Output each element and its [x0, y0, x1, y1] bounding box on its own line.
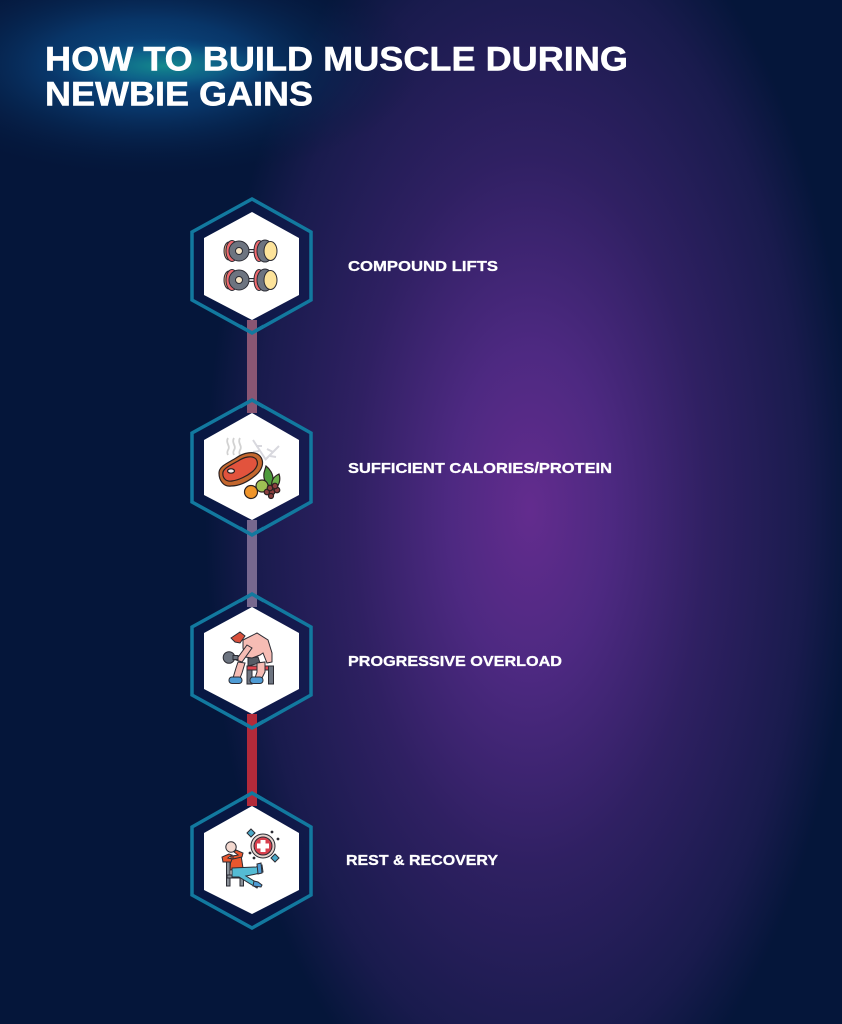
- connector: overload to rest: [247, 714, 257, 806]
- step 2: calories and protein: [192, 400, 311, 535]
- icon: resting person with medical cross: [222, 829, 279, 888]
- hexagon frame 3: [192, 594, 311, 728]
- label: sufficient calories/protein: SUFFICIENT CALORIES/PROTEIN: [348, 461, 612, 477]
- hexagon frame 2: [192, 400, 311, 535]
- label: progressive overload: PROGRESSIVE OVERLOAD: [348, 654, 562, 670]
- title: HOW TO BUILD MUSCLE DURING: [45, 40, 628, 78]
- sparkles: [249, 831, 279, 859]
- hexagon frame 4: [192, 793, 311, 928]
- connector: compound lifts to calories: [247, 320, 257, 413]
- icon: steak and produce: [219, 438, 280, 498]
- hexagon panel 1: [204, 212, 299, 320]
- title: [45, 40, 628, 114]
- step 1: compound lifts: [192, 199, 311, 333]
- label: rest and recovery: REST & RECOVERY: [346, 853, 498, 869]
- step 4: rest and recovery: [192, 793, 311, 928]
- icon: seated dumbbell lifter: [223, 632, 274, 684]
- connector: calories to overload: [247, 520, 257, 607]
- icon: dumbbells: [224, 240, 277, 291]
- hexagon panel 3: [204, 607, 299, 714]
- hexagon panel 4: [204, 806, 299, 914]
- hexagon frame 1: [192, 199, 311, 333]
- title: NEWBIE GAINS: [45, 76, 313, 114]
- step 3: progressive overload: [192, 594, 311, 728]
- hexagon panel 2: [204, 413, 299, 520]
- label: compound lifts: COMPOUND LIFTS: [348, 259, 498, 275]
